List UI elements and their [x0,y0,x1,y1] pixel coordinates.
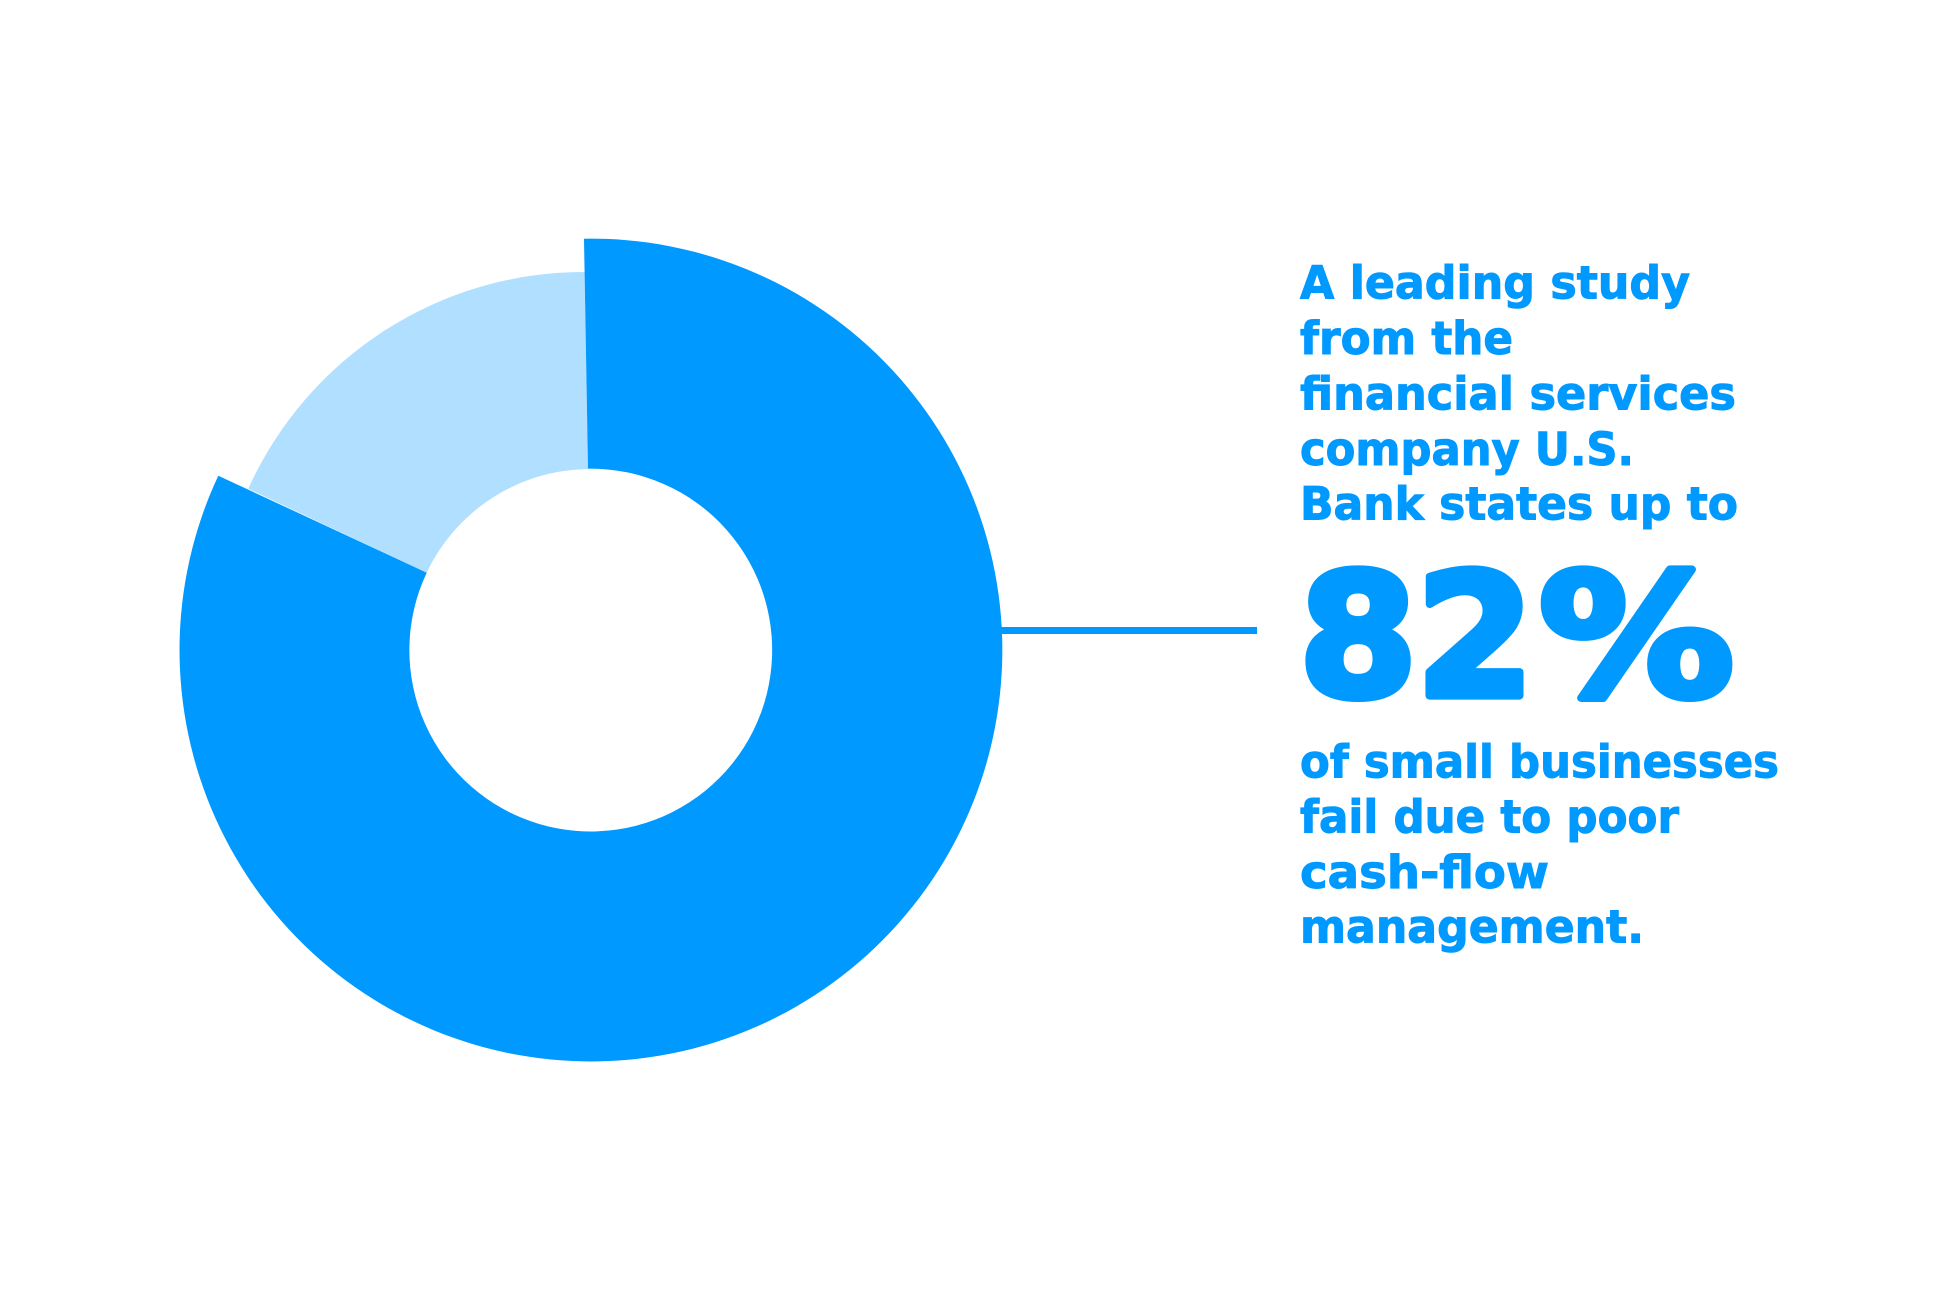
donut segment: 82% [180,239,1002,1061]
donut chart [180,239,1002,1061]
donut segment: remaining 18% [248,272,588,573]
statistic: 82% [1299,539,1734,737]
intro text [1300,257,1738,530]
statistic: 82%: % [1539,539,1734,737]
callout text [1299,257,1779,954]
intro text: from the [1300,312,1513,365]
intro text: A leading study [1300,257,1690,310]
connector line [1000,627,1257,634]
closing text: of small businesses [1300,735,1779,788]
closing text [1300,735,1779,954]
closing text: cash-flow [1300,846,1549,899]
closing text: fail due to poor [1300,791,1680,844]
intro text: company U.S. [1300,423,1634,476]
statistic: 82%: 2 [1416,539,1534,737]
closing text: management. [1300,901,1644,954]
intro text: Bank states up to [1300,477,1738,530]
intro text: financial services [1300,367,1736,420]
statistic: 82%: 8 [1299,539,1417,737]
